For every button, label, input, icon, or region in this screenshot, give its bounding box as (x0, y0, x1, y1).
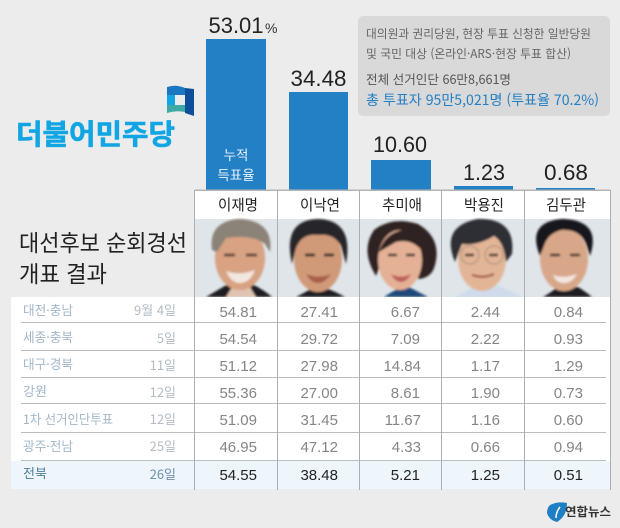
info box: voter turnout (358, 16, 610, 116)
candidate names: 박용진 (464, 194, 504, 215)
portrait: 김두관 (536, 219, 593, 297)
bar: 이낙연: 34.48 (290, 66, 346, 91)
row: 전북: 26일 (150, 464, 176, 483)
row: 세종·충북: 0.93 (554, 331, 583, 348)
row: 전북: 38.48 (300, 467, 338, 484)
row: 광주·전남: 4.33 (392, 439, 421, 456)
icon: Yonhap shield (547, 502, 567, 522)
bar chart: cumulative vote share (206, 13, 595, 190)
row: 대전·충남: 27.41 (300, 304, 338, 321)
row: 대전·충남 (23, 300, 583, 321)
row: 대전·충남: 9월 4일 (134, 300, 176, 319)
row: 전북: 0.51 (554, 467, 583, 484)
candidate names: 추미애 (382, 194, 422, 215)
candidate names: 이낙연 (300, 194, 340, 215)
row: 광주·전남: 광주·전남 (23, 436, 73, 455)
logo: Democratic Party (16, 86, 194, 153)
bar: 추미애 (371, 132, 431, 190)
row: 강원: 27.00 (300, 385, 338, 402)
portrait: 이재명 (206, 219, 272, 297)
bar: 김두관: 0.68 (544, 160, 588, 185)
row: 전북: 54.55 (219, 467, 257, 484)
bar: 이재명: 53.01 (208, 13, 264, 38)
row: 강원: 0.73 (554, 385, 583, 402)
row: 1차 선거인단투표: 1.16 (471, 412, 500, 429)
row: 대전·충남: 0.84 (554, 304, 583, 321)
highlighted row background (11, 461, 610, 489)
row: 강원: 12일 (150, 382, 176, 401)
row: 광주·전남 (23, 436, 583, 456)
info box: voter turnout: 및 국민 대상 (온라인·ARS·현장 투표 합산) (366, 45, 571, 62)
title: 개표 결과 (19, 255, 107, 289)
row: 세종·충북: 29.72 (300, 331, 338, 348)
portrait: 박용진 (451, 219, 522, 297)
row: 1차 선거인단투표 (23, 409, 583, 429)
bar: 이재명: 누적 (224, 144, 248, 164)
row: 1차 선거인단투표: 0.60 (554, 412, 583, 429)
row: 대구·경북: 11일 (150, 355, 176, 374)
info box: voter turnout: 전체 선거인단 66만8,661명 (366, 69, 511, 88)
results table (11, 190, 610, 490)
bar: 이재명 (206, 13, 277, 190)
row: 대구·경북: 27.98 (300, 358, 338, 375)
row: 1차 선거인단투표: 12일 (150, 409, 176, 428)
candidate names: 김두관 (546, 194, 586, 215)
row: 1차 선거인단투표: 11.67 (385, 412, 421, 429)
candidate names (218, 194, 586, 215)
bar: 이낙연 (289, 66, 348, 190)
row: 대구·경북: 1.17 (471, 358, 500, 375)
party name: 더불어민주당 (16, 113, 175, 153)
row: 대구·경북: 대구·경북 (23, 354, 73, 373)
candidate names: 이재명 (218, 194, 258, 215)
row: 전북: 1.25 (471, 467, 500, 484)
row: 전북: 전북 (23, 463, 47, 482)
row: 강원: 8.61 (391, 385, 420, 402)
logo: Yonhap News (547, 502, 611, 522)
row: 광주·전남: 47.12 (300, 439, 338, 456)
bar: 김두관 (536, 160, 595, 190)
logo: Yonhap News: 연합뉴스 (565, 503, 611, 520)
row: 광주·전남: 25일 (150, 436, 176, 455)
icon: party flag (167, 86, 194, 116)
row: 강원 (23, 381, 583, 402)
row: 광주·전남: 0.94 (554, 439, 583, 456)
portrait: 추미애 (367, 221, 437, 297)
bar: 이재명: % (265, 20, 277, 36)
row: 강원: 1.90 (471, 385, 500, 402)
portrait: 이낙연 (290, 219, 347, 297)
row: 대전·충남: 대전·충남 (23, 300, 73, 319)
row: 전북: 5.21 (391, 467, 420, 484)
row: 대전·충남: 54.81 (219, 304, 257, 321)
row: 광주·전남: 46.95 (219, 439, 257, 456)
bar: 이재명: 득표율 (217, 164, 255, 184)
info box: voter turnout: 대의원과 권리당원, 현장 투표 신청한 일반당원 (366, 25, 591, 42)
row: 강원: 강원 (23, 381, 47, 400)
row: 대구·경북: 51.12 (219, 358, 257, 375)
row: 대구·경북 (23, 354, 583, 375)
info box: voter turnout: 총 투표자 95만5,021명 (투표율 70.2%) (366, 90, 599, 110)
row: 1차 선거인단투표: 51.09 (219, 412, 257, 429)
row: 강원: 55.36 (219, 385, 257, 402)
row: 대전·충남: 6.67 (391, 304, 420, 321)
row: 세종·충북: 7.09 (391, 331, 420, 348)
row: 1차 선거인단투표: 31.45 (300, 412, 338, 429)
bar: 박용진 (454, 160, 513, 190)
row: 세종·충북: 세종·충북 (23, 327, 73, 346)
row: 세종·충북: 5일 (157, 328, 176, 347)
row: 전북 (23, 463, 583, 484)
title (19, 224, 187, 289)
row: 세종·충북: 54.54 (219, 331, 257, 348)
candidate portraits (195, 219, 610, 297)
row: 세종·충북: 2.22 (471, 331, 500, 348)
title: 대선후보 순회경선 (19, 224, 187, 258)
row: 대구·경북: 1.29 (554, 358, 583, 375)
row: 대전·충남: 2.44 (471, 304, 500, 321)
candidate header (195, 190, 610, 219)
row: 1차 선거인단투표: 1차 선거인단투표 (23, 409, 113, 428)
row: 세종·충북 (23, 327, 583, 348)
bar: 추미애: 10.60 (373, 132, 427, 157)
row: 광주·전남: 0.66 (471, 439, 500, 456)
bar: 박용진: 1.23 (463, 160, 505, 185)
row: 대구·경북: 14.84 (383, 358, 421, 375)
